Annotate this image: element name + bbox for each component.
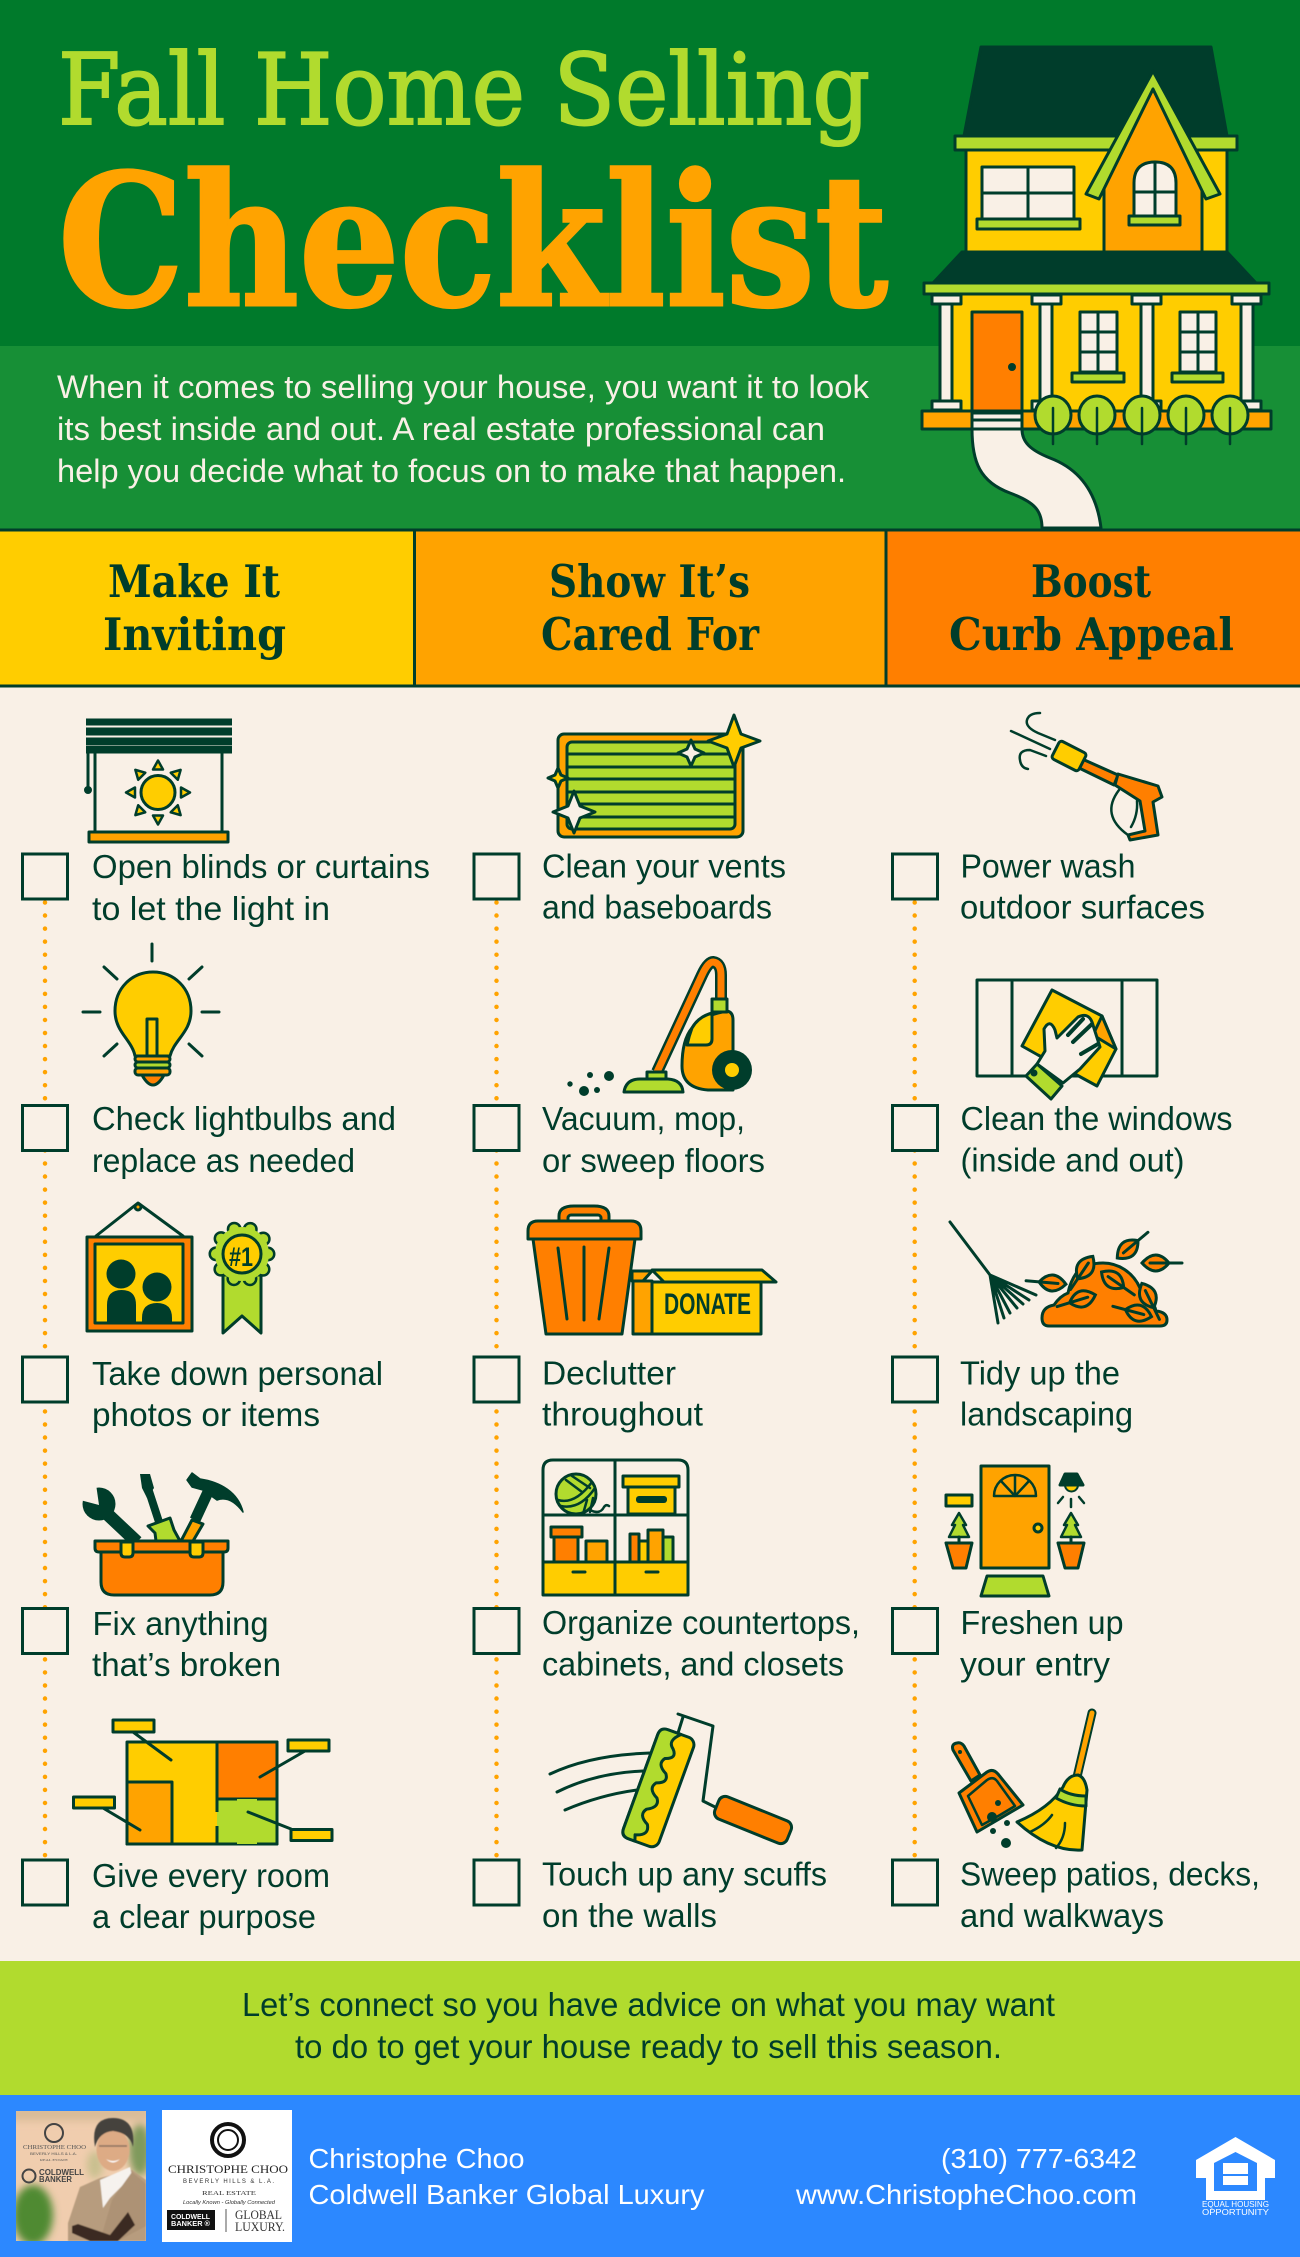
icon: trash can and donate box <box>528 1206 776 1334</box>
heading: Make It Inviting: Make It <box>108 555 280 608</box>
icon: sparkling vent <box>548 715 760 837</box>
call to action band: to do to get your house ready to sell this season. <box>295 2028 1002 2065</box>
checkbox and label: room purpose <box>22 1857 330 1935</box>
path to the door <box>972 429 1101 528</box>
donate label: DONATE <box>664 1288 751 1321</box>
checkbox and label: landscaping: Tidy up the <box>960 1354 1120 1392</box>
intro text <box>57 369 870 489</box>
checkbox and label: room purpose: Give every room <box>92 1857 330 1894</box>
agent photo: COLDWELL <box>39 2168 84 2177</box>
heading: Make It Inviting: Inviting <box>103 608 286 661</box>
footer panel <box>0 2095 1300 2257</box>
checkbox and label: check lightbulbs: replace as needed <box>92 1142 355 1179</box>
checkbox and label: personal photos: photos or items <box>92 1396 320 1433</box>
call to action band <box>0 1961 1300 2095</box>
agent logo: CHRISTOPHE CHOO <box>168 2162 288 2176</box>
column headers band <box>0 530 1300 686</box>
heading: Show It's Cared For: Cared For <box>541 608 760 661</box>
agent photo: BANKER <box>39 2175 72 2184</box>
icon: family photo frame <box>87 1203 192 1331</box>
checkbox and label: touch up: on the walls <box>542 1897 717 1934</box>
checkbox and label: power wash: Power wash <box>960 848 1136 884</box>
checkbox and label: clean windows: Clean the windows <box>960 1100 1232 1137</box>
dotted connector lines <box>45 902 915 1860</box>
icon: number one ribbon: #1 <box>229 1242 253 1272</box>
checkbox and label: fix anything: that’s broken <box>92 1646 281 1683</box>
checkbox and label: touch up: Touch up any scuffs <box>542 1856 827 1892</box>
heading: Show It's Cared For <box>541 555 760 661</box>
agent photo <box>16 2111 146 2241</box>
checkbox and label: fix anything <box>22 1605 281 1683</box>
checklist column: Show It's Cared For <box>474 715 860 1934</box>
checkbox and label: clean windows <box>892 1100 1232 1178</box>
phone and website: (310) 777-6342 <box>941 2143 1137 2174</box>
checkbox and label: check lightbulbs <box>22 1100 396 1179</box>
agent logo: Locally Known - Globally Connected <box>183 2200 276 2206</box>
icon: toolbox <box>80 1473 243 1595</box>
checkbox and label: declutter <box>474 1354 703 1432</box>
checkbox and label: declutter: Declutter <box>542 1354 676 1392</box>
heading: Boost Curb Appeal: Boost <box>1031 555 1151 608</box>
agent photo: CHRISTOPHE CHOO <box>23 2144 86 2151</box>
intro text: When it comes to selling your house, you want it to look <box>57 369 870 405</box>
phone and website: www.ChristopheChoo.com <box>795 2179 1137 2210</box>
agent logo: GLOBAL <box>235 2207 282 2222</box>
checkbox and label: entry <box>892 1604 1124 1682</box>
checkbox and label: check lightbulbs: Check lightbulbs and <box>92 1100 396 1137</box>
icon: blinds with sun <box>86 718 232 842</box>
checkbox and label: open blinds: to let the light in <box>92 890 330 927</box>
checkbox and label: personal photos <box>22 1355 383 1433</box>
agent photo: BEVERLY HILLS & L.A. <box>30 2152 77 2156</box>
icon: equal housing opportunity <box>1196 2137 1275 2217</box>
checklist column: Boost Curb Appeal <box>892 713 1260 1934</box>
icon: rake and leaf pile <box>950 1222 1182 1326</box>
agent logo: BEVERLY HILLS & L.A. <box>183 2179 274 2185</box>
agent photo: REAL ESTATE <box>40 2158 68 2162</box>
agent name and brokerage: Christophe Choo <box>308 2143 524 2174</box>
checkbox and label: vacuum: Vacuum, mop, <box>542 1100 745 1137</box>
icon: vacuum <box>567 962 752 1096</box>
icon: equal housing opportunity: EQUAL HOUSING <box>1202 2199 1269 2209</box>
icon: power washer <box>1011 713 1162 840</box>
icon: organized shelves <box>543 1460 688 1595</box>
checkbox and label: organize <box>474 1604 860 1682</box>
checkbox and label: vacuum: or sweep floors <box>542 1142 765 1179</box>
checkbox and label: entry: your entry <box>960 1646 1111 1682</box>
icon: equal housing opportunity: OPPORTUNITY <box>1202 2207 1269 2217</box>
checkbox and label: clean vents <box>474 848 786 926</box>
icon: house <box>922 47 1271 528</box>
checkbox and label: entry: Freshen up <box>960 1604 1124 1641</box>
checkbox and label: landscaping: landscaping <box>960 1396 1133 1432</box>
checkbox and label: room purpose: a clear purpose <box>92 1898 316 1935</box>
checkbox and label: fix anything: Fix anything <box>92 1605 268 1642</box>
heading: Boost Curb Appeal <box>949 555 1234 661</box>
checkbox and label: power wash <box>892 848 1205 926</box>
phone and website <box>795 2143 1137 2210</box>
icon: floor plan <box>74 1720 332 1844</box>
checkbox and label: organize: cabinets, and closets <box>542 1646 844 1682</box>
checkbox and label: clean windows: (inside and out) <box>960 1142 1184 1178</box>
title line: Fall Home Selling: Fall Home Selling <box>58 34 870 148</box>
agent logo: BANKER ® <box>171 2220 211 2228</box>
icon: cleaning window <box>977 980 1157 1099</box>
agent logo: COLDWELL <box>171 2214 211 2221</box>
call to action band: Let’s connect so you have advice on what you may want <box>242 1986 1055 2023</box>
title line: Checklist: Checklist <box>58 134 888 348</box>
checkbox and label: sweep <box>892 1856 1260 1934</box>
checkbox and label: touch up <box>474 1856 827 1934</box>
icon: lightbulb <box>83 944 219 1085</box>
checkbox and label: sweep: and walkways <box>960 1897 1164 1934</box>
icon: broom and dustpan <box>952 1713 1092 1850</box>
heading: Make It Inviting <box>103 555 286 661</box>
checkbox and label: declutter: throughout <box>542 1396 703 1432</box>
agent logo: LUXURY. <box>235 2219 285 2234</box>
checkbox and label: personal photos: Take down personal <box>92 1355 383 1392</box>
checkbox and label: open blinds <box>22 848 430 927</box>
agent name and brokerage: Coldwell Banker Global Luxury <box>308 2179 704 2210</box>
checkbox and label: power wash: outdoor surfaces <box>960 888 1205 926</box>
checkbox and label: organize: Organize countertops, <box>542 1604 860 1641</box>
checkbox and label: clean vents: Clean your vents <box>542 848 786 884</box>
icon: number one ribbon <box>215 1227 269 1333</box>
heading: Show It's Cared For: Show It’s <box>549 555 750 608</box>
checkbox and label: landscaping <box>892 1354 1133 1432</box>
intro text: help you decide what to focus on to make that happen. <box>57 453 846 489</box>
heading: Boost Curb Appeal: Curb Appeal <box>949 608 1234 661</box>
icon: front entry <box>946 1466 1084 1596</box>
agent logo <box>162 2110 292 2242</box>
agent name and brokerage <box>308 2143 704 2210</box>
checklist column: Make It Inviting <box>22 718 430 1935</box>
checkbox and label: clean vents: and baseboards <box>542 888 772 926</box>
checkbox and label: sweep: Sweep patios, decks, <box>960 1856 1260 1892</box>
checkbox and label: vacuum <box>474 1100 765 1179</box>
agent logo: REAL ESTATE <box>202 2190 256 2197</box>
intro text: its best inside and out. A real estate professional can <box>57 411 825 447</box>
icon: paint roller <box>550 1714 794 1849</box>
checkbox and label: open blinds: Open blinds or curtains <box>92 848 430 885</box>
header panel <box>0 0 1300 530</box>
